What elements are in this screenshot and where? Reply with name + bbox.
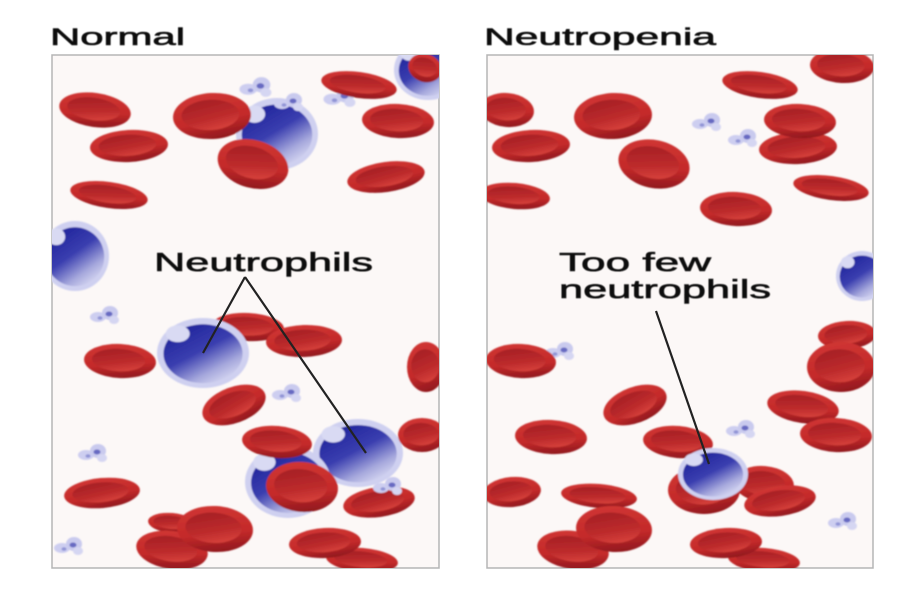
callout: Neutrophils [154, 247, 373, 453]
callout: Too few neutrophils [559, 247, 771, 464]
red blood cells: neutropenia panel [479, 47, 877, 575]
callout: Neutrophils: Neutrophils [154, 247, 373, 277]
arrow: neutropenia pointer [656, 311, 709, 464]
heading: Neutropenia: Neutropenia [484, 24, 717, 51]
heading: Normal: Normal [50, 24, 185, 51]
red blood cells: normal panel [57, 49, 446, 575]
neutrophils: neutropenia panel [678, 251, 888, 500]
platelet over red cell [373, 477, 402, 495]
red blood cells behind neutrophils [211, 311, 417, 522]
panel: normal blood [51, 54, 440, 569]
platelets: normal panel [54, 77, 355, 555]
platelets: neutropenia panel [545, 113, 857, 530]
neutrophils: normal panel [41, 40, 462, 518]
callout: Too few neutrophils: neutrophils [559, 274, 771, 304]
callout: Too few neutrophils: Too few [559, 247, 711, 277]
panel: neutropenia blood [479, 47, 888, 575]
arrow: neutrophil pointers [203, 277, 366, 453]
